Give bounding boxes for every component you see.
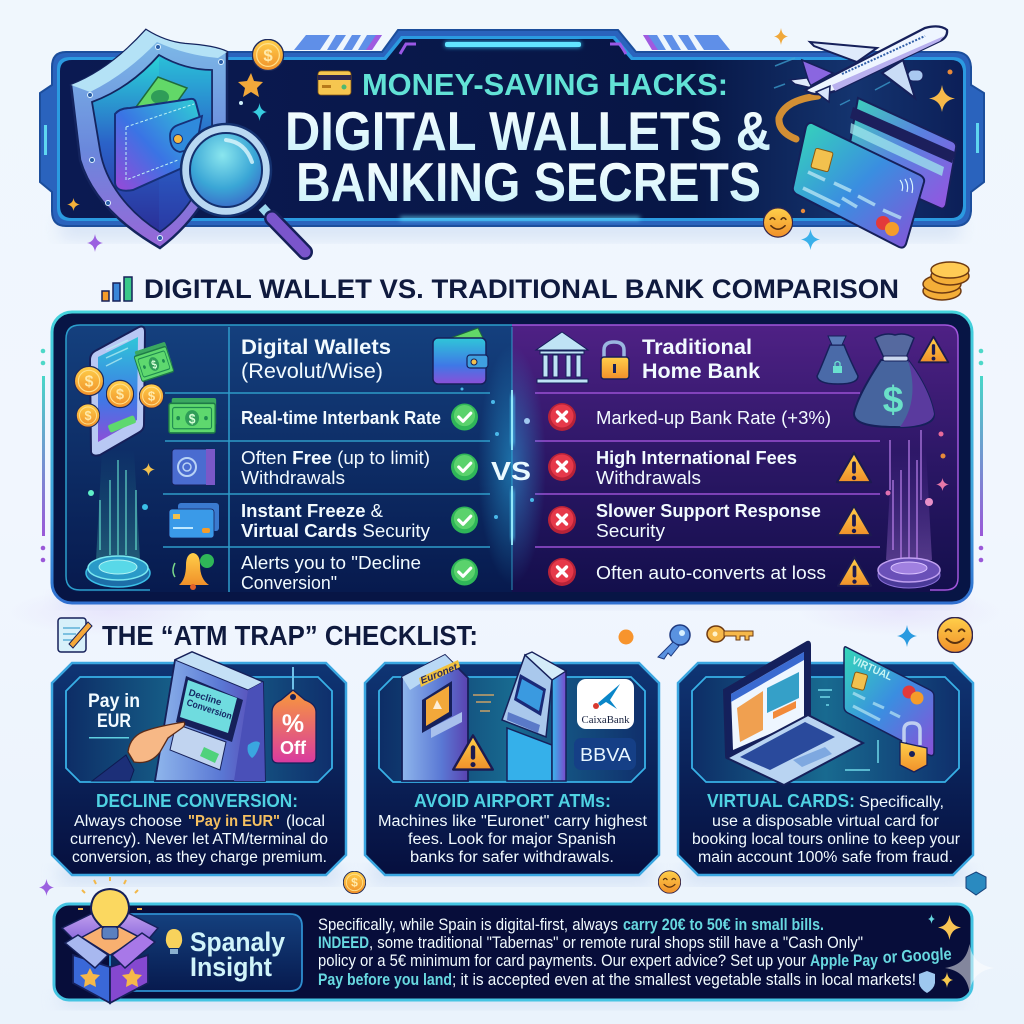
illustration: euronet atm — [402, 655, 493, 781]
row: auto-converts — [548, 557, 871, 586]
light bulb — [91, 889, 129, 927]
panel: spanaly insight — [54, 877, 972, 1003]
title: BANKING SECRETS — [296, 151, 761, 213]
row: marked-up rate — [548, 403, 831, 431]
header coin and stars left — [67, 39, 284, 252]
icon: small money bag — [817, 336, 858, 384]
text: wallets heading: Digital Wallets — [241, 336, 391, 359]
text: bank heading — [642, 336, 760, 383]
row: slower support: Security — [596, 520, 666, 541]
row: alerts: Conversion" — [241, 572, 337, 593]
header decorative stripes — [294, 35, 730, 50]
row: instant freeze — [169, 500, 478, 541]
icon: shield with wallet and magnifier — [71, 30, 305, 252]
panel: traditional bank side — [512, 325, 958, 592]
illustration: bank atm — [502, 652, 566, 781]
icon: discount tag: % — [282, 710, 304, 738]
card text: banks for safer withdrawals. — [410, 849, 614, 866]
text: insight body: ; it is accepted even at the smallest vegetable stalls in local markets! — [452, 970, 916, 989]
illustration: laptop — [724, 642, 878, 785]
icon: gold key — [707, 626, 753, 642]
card text: VIRTUAL CARDS: — [707, 790, 855, 811]
card text: conversion, as they charge premium. — [72, 849, 327, 866]
text: insight body — [318, 915, 953, 993]
illustration: atm — [92, 652, 265, 781]
header banner — [40, 30, 984, 226]
card text: AVOID AIRPORT ATMs: — [414, 790, 611, 811]
text: wallets heading: (Revolut/Wise) — [241, 360, 383, 383]
row: real-time rate — [169, 398, 478, 433]
insight label box: Insight — [190, 952, 272, 982]
row: slower support — [548, 500, 871, 541]
row: international fees — [548, 447, 871, 488]
row: international fees: High International Fees — [596, 447, 797, 468]
icon: magnifier — [181, 124, 305, 252]
card: virtual cards — [678, 642, 973, 875]
illustration: beam with platform — [86, 450, 155, 587]
row: real-time rate: Real-time Interbank Rate — [241, 408, 441, 428]
icon: hand pressing — [92, 722, 185, 781]
logo: bbva — [574, 738, 636, 770]
card text — [692, 790, 960, 866]
title: DIGITAL WALLETS & — [285, 100, 771, 162]
panel: comparison — [52, 312, 972, 603]
text: pay in eur: EUR — [97, 711, 131, 732]
illustration: phone with coins — [74, 327, 175, 456]
text: insight body: Specifically, while Spain is digital-first, always — [318, 915, 618, 934]
insight label box: Spanaly — [190, 927, 285, 957]
row: free withdrawals — [172, 447, 478, 488]
text: bank heading: Home Bank — [642, 360, 760, 383]
row: free withdrawals: Withdrawals — [241, 467, 345, 488]
icon: bank cards — [793, 98, 956, 248]
subtitle with card icon: MONEY-SAVING HACKS: — [362, 67, 728, 102]
icon: wallet clasp — [170, 116, 202, 152]
panel: digital wallets side — [66, 325, 512, 593]
logo: bbva: BBVA — [580, 745, 631, 765]
icon: large money bag — [854, 334, 934, 427]
atm checklist heading: THE “ATM TRAP” CHECKLIST: — [102, 620, 478, 651]
box opening — [75, 912, 147, 955]
insight label box — [110, 914, 302, 991]
logo: caixabank — [577, 679, 634, 729]
header decorations right — [763, 28, 955, 250]
glow bars — [400, 42, 640, 220]
row: auto-converts: Often auto-converts at loss — [596, 562, 826, 583]
text: bank heading: Traditional — [642, 336, 752, 359]
illustration: purple beam with platform — [878, 430, 949, 588]
card: avoid airport atms — [365, 652, 659, 875]
text: insight body: carry 20€ to 50€ in small bills. — [623, 915, 824, 934]
logo: caixabank: CaixaBank — [582, 715, 630, 726]
illustration: virtual card with lock: VIRTUAL — [850, 655, 894, 683]
card text: use a disposable virtual card for — [712, 813, 939, 830]
icon: bar chart — [102, 277, 132, 301]
text: pay in eur: Pay in — [88, 691, 140, 712]
vs divider: VS — [491, 456, 531, 486]
text: insight body: Apple Pay — [810, 951, 878, 970]
comparison heading — [102, 262, 969, 304]
row: international fees: Withdrawals — [596, 467, 701, 488]
icon: discount tag — [272, 667, 316, 763]
icon: open box with light bulb — [62, 877, 158, 1003]
text: insight body: or Google — [882, 944, 952, 967]
side rails — [41, 349, 983, 562]
icon: large money bag: $ — [883, 379, 904, 420]
decorations between cards and insight — [39, 871, 986, 896]
icon: lock — [601, 342, 629, 379]
card text: Always choose — [74, 813, 182, 830]
icon: wallet — [433, 328, 488, 384]
comparison heading: DIGITAL WALLET VS. TRADITIONAL BANK COMPARISON — [144, 274, 899, 304]
icon: small bulb — [166, 929, 182, 954]
text: insight body: , some traditional "Tabernas" or remote rural shops still have a "Cash Only" — [369, 933, 863, 952]
row: instant freeze: Virtual Cards Security — [241, 520, 431, 541]
illustration: euronet atm: Euronet — [419, 662, 460, 687]
text: insight body: INDEED — [318, 933, 369, 952]
illustration: virtual card with lock — [844, 647, 934, 772]
icon: airplane — [774, 26, 947, 139]
icon: padlock — [900, 723, 927, 772]
vs divider — [460, 327, 546, 590]
card text: Specifically, — [859, 794, 944, 811]
icon: checklist note and pencil — [58, 618, 92, 652]
row: marked-up rate: Marked-up Bank Rate (+3%) — [596, 407, 831, 428]
card: decline conversion — [52, 652, 346, 875]
card text — [70, 790, 328, 866]
icon: bank — [536, 332, 588, 383]
card text: currency). Never let ATM/terminal do — [70, 831, 328, 848]
card text: Machines like "Euronet" carry highest — [378, 813, 648, 830]
icon: blue key — [658, 625, 690, 659]
card text: main account 100% safe from fraud. — [698, 849, 953, 866]
card text — [378, 790, 648, 866]
text: pay in eur — [88, 691, 140, 738]
card text: DECLINE CONVERSION: — [96, 790, 298, 811]
row: alerts — [173, 552, 478, 593]
decorative dash lines — [473, 695, 494, 711]
icon: discount tag: Off — [280, 738, 307, 758]
icon: coin stack — [923, 262, 969, 300]
row: free withdrawals: Often Free (up to limit) — [241, 447, 430, 468]
icon: gold card — [318, 71, 351, 95]
banner frame — [40, 30, 984, 226]
title — [285, 100, 771, 213]
illustration: atm: Decline — [187, 687, 223, 708]
text: wallets heading — [241, 336, 391, 383]
row: slower support: Slower Support Response — [596, 500, 821, 521]
watermark star — [945, 944, 994, 992]
text: insight body: Pay before you land — [318, 970, 452, 989]
box body — [73, 955, 110, 1003]
card text: booking local tours online to keep your — [692, 831, 960, 848]
icon: wallet — [115, 99, 200, 191]
decorations between heading and cards — [618, 617, 973, 659]
icon: small shield — [919, 971, 935, 993]
icon: cash in wallet — [128, 77, 187, 118]
icon: warning top right — [919, 337, 948, 362]
row: alerts: Alerts you to "Decline — [241, 552, 421, 573]
row: instant freeze: Instant Freeze & — [241, 500, 384, 521]
card text: fees. Look for major Spanish — [408, 831, 616, 848]
illustration: atm: Conversion — [185, 697, 233, 722]
card text: (local — [286, 813, 325, 830]
text: insight body: policy or a 5€ minimum for card payments. Our expert advice? Set up your — [318, 951, 806, 970]
card text: "Pay in EUR" — [188, 813, 280, 830]
